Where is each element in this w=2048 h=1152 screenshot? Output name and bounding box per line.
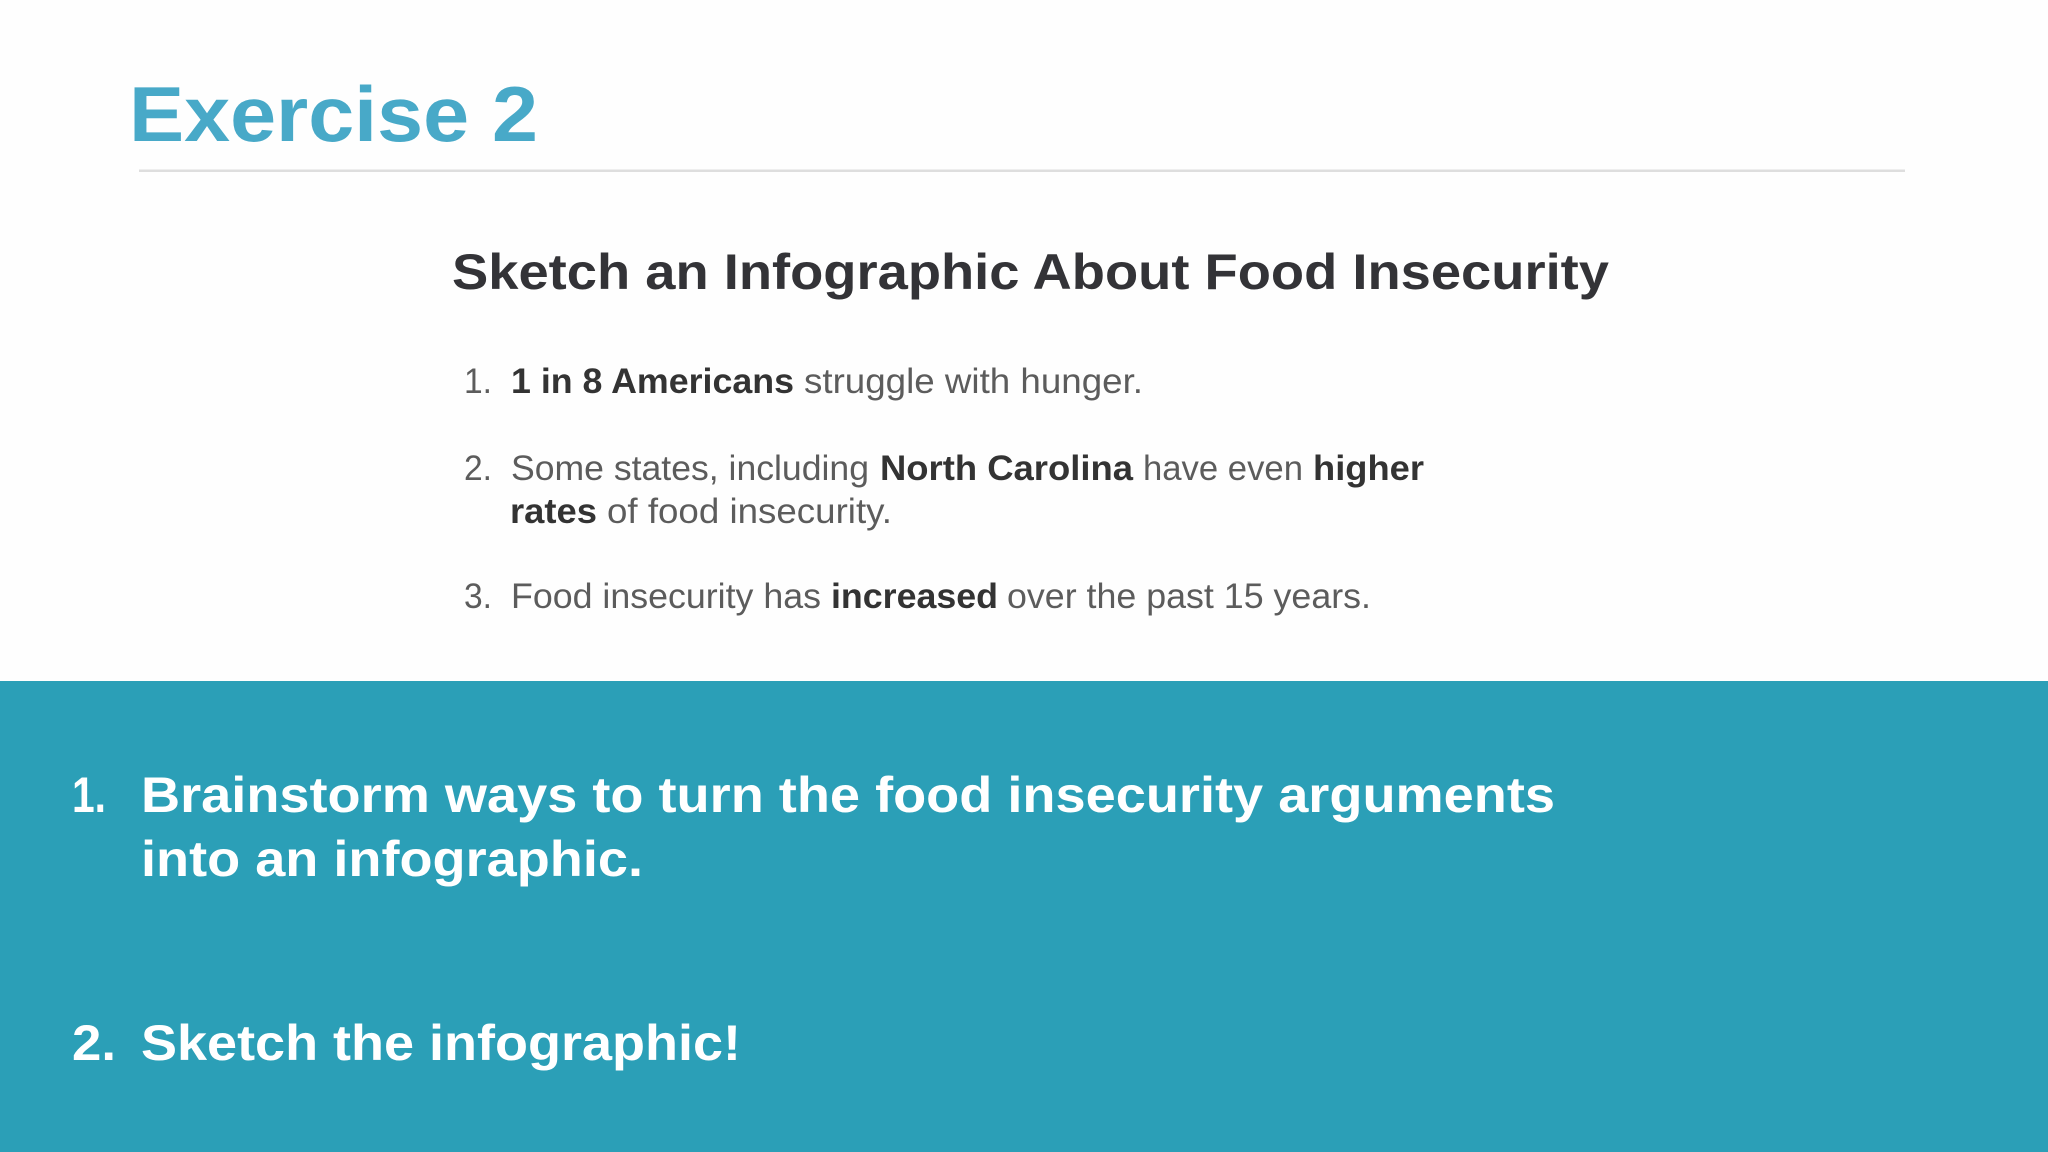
fact 1 [464,362,1143,401]
fact 3: increased [831,577,998,616]
fact 2: Some states, including [511,449,869,488]
fact 3: over the past 15 years. [1007,577,1371,616]
fact 2: North Carolina [880,449,1134,488]
title: Exercise 2 [129,70,538,158]
fact 3: 3. [464,577,492,616]
fact 1: struggle with hunger. [804,362,1143,401]
instruction 1 [72,767,1555,887]
instruction 1: into an infographic. [141,831,643,887]
instruction 1: 1. [72,767,106,823]
fact 2: 2. [464,449,492,488]
fact 3: Food insecurity has [511,577,821,616]
panel: exercise instructions [0,681,2048,1152]
fact 3 [464,577,1371,616]
fact 2: rates [510,492,597,531]
instruction 2: 2. [72,1015,116,1071]
fact 2 [464,449,1424,531]
fact 2: higher [1313,449,1424,488]
fact 2: of food insecurity. [607,492,892,531]
heading: Sketch an Infographic About Food Insecurity [452,244,1609,300]
instruction 2: Sketch the infographic! [141,1015,741,1071]
fact 1: 1 in 8 Americans [511,362,794,401]
fact 2: have even [1143,449,1303,488]
text block: food insecurity facts [464,362,1424,616]
instruction 1: Brainstorm ways to turn the food insecurity arguments [141,767,1555,823]
fact 1: 1. [464,362,492,401]
